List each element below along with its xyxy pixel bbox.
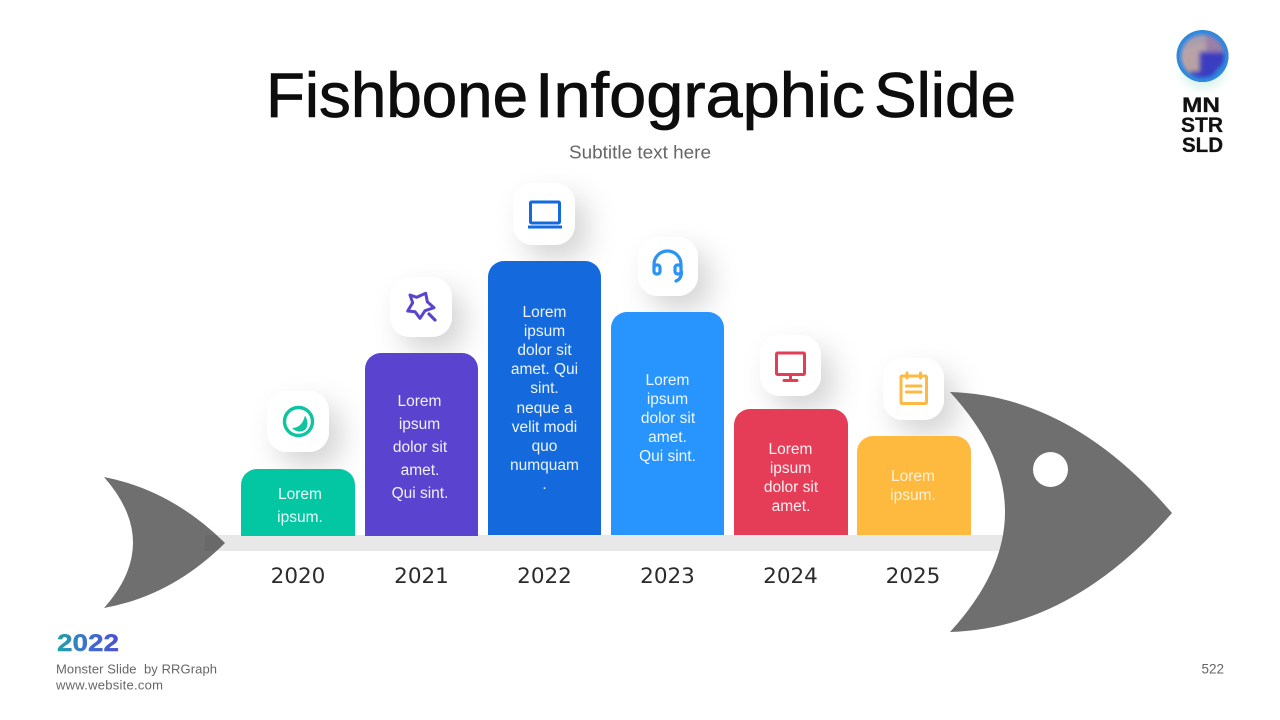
text 2022: quo [532,438,557,455]
text 2021: Lorem [398,393,441,410]
footer year: 2022 [57,630,119,657]
column 2021 [365,277,478,589]
column 2024 [734,335,848,589]
logo [1176,30,1228,152]
year 2023: 2023 [640,564,695,589]
year 2025: 2025 [886,564,940,589]
text 2024: ipsum [770,460,811,477]
text 2022: velit modi [512,419,577,436]
text 2023: amet. [648,429,687,446]
subtitle: Subtitle text here [569,142,711,162]
icon tile: 2020 [267,391,329,452]
year 2020: 2020 [271,564,325,589]
spine overlap on tail [205,535,227,551]
bar 2020 [241,469,355,536]
text 2022: . [542,476,547,493]
text 2021: dolor sit [393,439,448,456]
text 2021: ipsum [399,416,440,433]
fish tail [104,477,225,608]
title [266,61,1016,131]
text 2024: Lorem [769,441,812,458]
text 2020 [277,486,323,526]
column 2020 [241,391,355,589]
bar 2021 [365,353,478,536]
text 2021: amet. [401,462,439,479]
footer credit: Monster Slide by RRGraph [56,662,217,676]
text 2022: ipsum [524,323,565,340]
text 2022: Lorem [523,304,566,321]
text 2022: neque a [516,400,573,417]
fish spine [205,535,1007,551]
column 2025 [857,358,971,589]
title: Slide [874,61,1016,131]
fish eye [1033,452,1068,487]
bar 2022 [488,261,601,535]
text 2023: Qui sint. [639,448,696,465]
footer credit [55,662,217,692]
title: Infographic [535,61,865,131]
text 2023: dolor sit [641,410,696,427]
fish head [950,392,1172,632]
logo text [1181,93,1223,157]
icon tile: 2023 [638,237,698,296]
text 2024: amet. [772,498,810,515]
text 2023: Lorem [646,372,689,389]
logo sphere [1176,30,1228,92]
icon tile: 2021 [390,277,452,337]
text 2022: sint. [530,380,559,397]
logo text: SLD [1182,133,1223,157]
text 2020: Lorem [278,486,322,503]
icon tile: 2022 [513,183,575,245]
text 2024: dolor sit [764,479,819,496]
bar 2025 [857,436,971,535]
text 2021: Qui sint. [392,485,448,502]
text 2020: ipsum. [277,509,323,526]
logo text: STR [1181,113,1223,137]
column 2023 [611,237,724,589]
text 2022: dolor sit [517,342,572,359]
text 2025: Lorem [891,468,935,485]
bar 2023 [611,312,724,535]
title: Fishbone [266,61,528,131]
footer credit: www.website.com [55,678,163,692]
year 2021: 2021 [394,564,449,589]
text 2024 [764,441,819,515]
text 2025 [890,468,936,504]
text 2025: ipsum. [890,487,936,504]
page number: 522 [1201,662,1224,676]
text 2023 [639,372,696,465]
bar 2024 [734,409,848,535]
text 2022 [510,304,579,493]
text 2022: amet. Qui [511,361,578,378]
logo text: MN [1182,93,1220,117]
year 2024: 2024 [763,564,818,589]
text 2022: numquam [510,457,579,474]
icon tile: 2025 [883,358,944,420]
column 2022 [488,183,601,589]
year 2022: 2022 [517,564,572,589]
icon tile: 2024 [760,335,821,396]
text 2023: ipsum [647,391,688,408]
text 2021 [392,393,448,502]
